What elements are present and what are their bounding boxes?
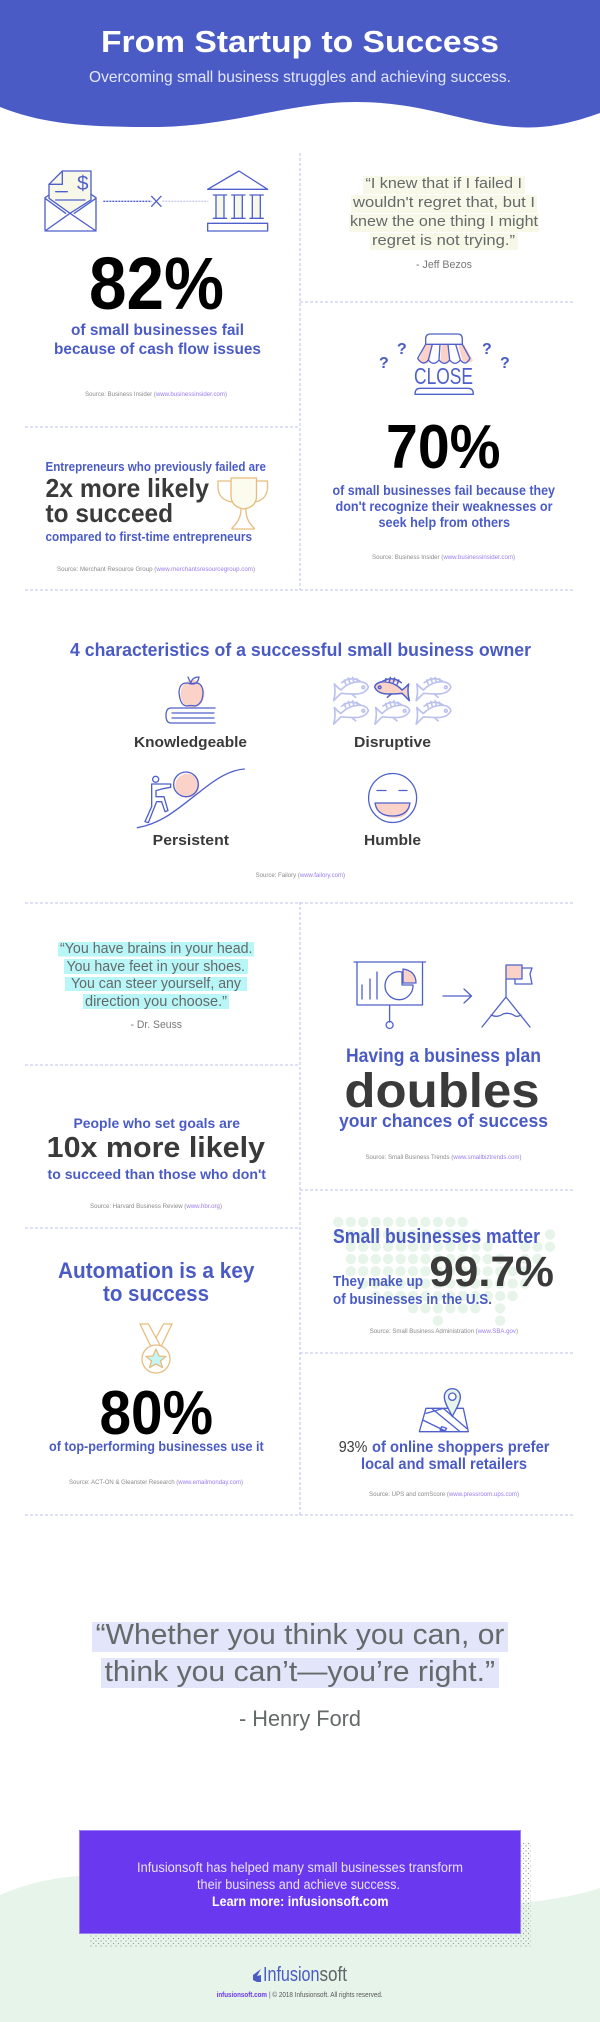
panel: failed entrepreneurs — [46, 460, 268, 573]
source: Source: Merchant Resource Group (www.merchantsresourcegroup.com) — [57, 566, 255, 573]
panel: small businesses matter — [333, 1217, 555, 1335]
question marks — [379, 341, 510, 372]
icon: apple on book — [166, 677, 215, 723]
panel: local shoppers — [339, 1389, 550, 1498]
question marks: ? — [500, 355, 510, 372]
subtitle: Overcoming small business struggles and achieving success. — [89, 69, 511, 86]
panel: Jeff Bezos quote: knew the one thing I might — [350, 213, 539, 230]
panel: automation: Automation is a key — [58, 1258, 255, 1283]
panel: business plan — [339, 962, 548, 1161]
panel: business plan: Having a business plan — [346, 1046, 541, 1067]
panel: Henry Ford quote: “Whether you think you can, or — [96, 1619, 505, 1651]
icon: trophy — [218, 478, 268, 529]
question marks: ? — [482, 341, 492, 358]
panel: automation: 80% — [100, 1379, 213, 1448]
panel: local shoppers: of online shoppers prefer — [372, 1439, 550, 1456]
statistic caption — [54, 322, 261, 358]
Infusionsoft logo: soft — [320, 1964, 347, 1986]
panel: business plan: doubles — [344, 1065, 540, 1118]
panel: closed store statistic: of small businesses fail because they — [332, 483, 555, 498]
panel: goal setters — [47, 1115, 266, 1210]
panel: local shoppers: 93% — [339, 1439, 368, 1456]
panel: Dr. Seuss quote: direction you choose.” — [85, 994, 227, 1010]
panel: closed store statistic: 70% — [386, 413, 500, 482]
label: Persistent — [153, 832, 229, 849]
label: Humble — [364, 832, 421, 849]
panel: goal setters: 10x more likely — [47, 1132, 265, 1164]
source: Source: Business Insider (www.businessinsider.com) — [85, 391, 227, 398]
source: Source: Failory (www.failory.com) — [256, 872, 345, 879]
panel: goal setters: People who set goals are — [74, 1115, 240, 1131]
source: Source: Small Business Trends (www.smallbiztrends.com) — [366, 1154, 522, 1161]
panel: business plan: your chances of success — [339, 1111, 548, 1131]
copyright line: | © 2018 Infusionsoft. All rights reserved. — [269, 1991, 383, 1999]
copyright line: infusionsoft.com — [217, 1992, 267, 1999]
attribution: - Henry Ford — [239, 1706, 361, 1731]
call to action box: their business and achieve success. — [197, 1877, 400, 1892]
panel: closed store statistic: seek help from others — [378, 515, 510, 530]
panel: Henry Ford quote: think you can’t—you’re right.” — [104, 1656, 495, 1688]
label: Disruptive — [354, 734, 431, 751]
call to action box — [80, 1830, 531, 1947]
statistic caption: of small businesses fail — [71, 322, 244, 339]
question marks: ? — [379, 355, 389, 372]
title: From Startup to Success — [101, 24, 499, 59]
panel: Dr. Seuss quote: You can steer yourself, any — [71, 976, 242, 992]
source: Source: Harvard Business Review (www.hbr.org) — [90, 1203, 222, 1210]
header banner — [0, 0, 600, 128]
source: Source: Business Insider (www.businessinsider.com) — [372, 554, 515, 561]
icon: laughing face — [369, 774, 417, 822]
panel: Jeff Bezos quote: wouldn't regret that, but I — [352, 194, 535, 211]
dotted map of the U.S. — [333, 1217, 555, 1326]
icon: person pushing boulder uphill — [137, 769, 244, 828]
panel: failed entrepreneurs: 2x more likely — [46, 473, 210, 503]
panel: Jeff Bezos quote: “I knew that if I failed I — [366, 175, 522, 192]
panel: Dr. Seuss quote — [58, 941, 254, 1031]
panel: small businesses matter: They make up — [333, 1274, 423, 1290]
panel: cash flow statistic — [45, 171, 268, 398]
panel: automation — [49, 1258, 264, 1486]
panel: closed store statistic: don't recognize their weaknesses or — [336, 499, 553, 514]
panel: small businesses matter: Small businesses matter — [333, 1226, 540, 1248]
big number: 82% — [89, 242, 224, 325]
icon: school of fish with one swimming opposite — [334, 677, 451, 724]
label: Knowledgeable — [134, 734, 247, 751]
question marks: ? — [397, 341, 407, 358]
store sign: CLOSE — [414, 363, 473, 389]
panel: closed store statistic — [332, 334, 555, 561]
footer background wave — [0, 1876, 600, 2022]
icon: medal — [140, 1324, 172, 1373]
icon: presentation board, arrow and flagged mountain — [354, 962, 532, 1028]
source: Source: ACT-ON & Gleanster Research (www.emailmonday.com) — [69, 1479, 243, 1486]
source: Source: Small Business Administration (www.SBA.gov) — [370, 1328, 518, 1335]
panel: automation: to success — [103, 1281, 209, 1306]
panel: automation: of top-performing businesses use it — [49, 1438, 264, 1454]
icon: invoice, envelope and bank: $ — [77, 172, 89, 195]
panel: failed entrepreneurs: compared to first-time entrepreneurs — [46, 530, 252, 544]
Infusionsoft logo: Infusion — [263, 1964, 320, 1986]
statistic caption: because of cash flow issues — [54, 341, 261, 358]
icon: closed store — [415, 334, 473, 394]
panel: Dr. Seuss quote: You have feet in your shoes. — [66, 959, 245, 975]
panel: Jeff Bezos quote — [349, 175, 539, 271]
icon: map with pin — [419, 1389, 468, 1432]
panel: failed entrepreneurs: Entrepreneurs who previously failed are — [46, 460, 266, 474]
panel: small businesses matter: of businesses in the U.S. — [333, 1292, 492, 1308]
copyright line — [217, 1991, 383, 1999]
heading: 4 characteristics of a successful small business owner — [70, 640, 531, 660]
panel: failed entrepreneurs: to succeed — [46, 498, 173, 528]
panel: goal setters: to succeed than those who don't — [48, 1166, 266, 1182]
attribution: - Dr. Seuss — [130, 1019, 182, 1031]
panel: local shoppers: local and small retailers — [361, 1456, 527, 1473]
panel: 4 characteristics — [70, 640, 531, 879]
panel: small businesses matter: 99.7% — [429, 1248, 554, 1296]
call to action box: Learn more: infusionsoft.com — [212, 1894, 388, 1909]
call to action box: Infusionsoft has helped many small businesses transform — [137, 1860, 463, 1875]
attribution: - Jeff Bezos — [416, 259, 472, 271]
panel: Dr. Seuss quote: “You have brains in your head. — [60, 941, 252, 957]
source: Source: UPS and comScore (www.pressroom.ups.com) — [369, 1491, 519, 1498]
panel: Henry Ford quote — [92, 1619, 508, 1731]
panel: Jeff Bezos quote: regret is not trying.” — [372, 232, 515, 249]
icon: invoice, envelope and bank — [45, 171, 268, 231]
